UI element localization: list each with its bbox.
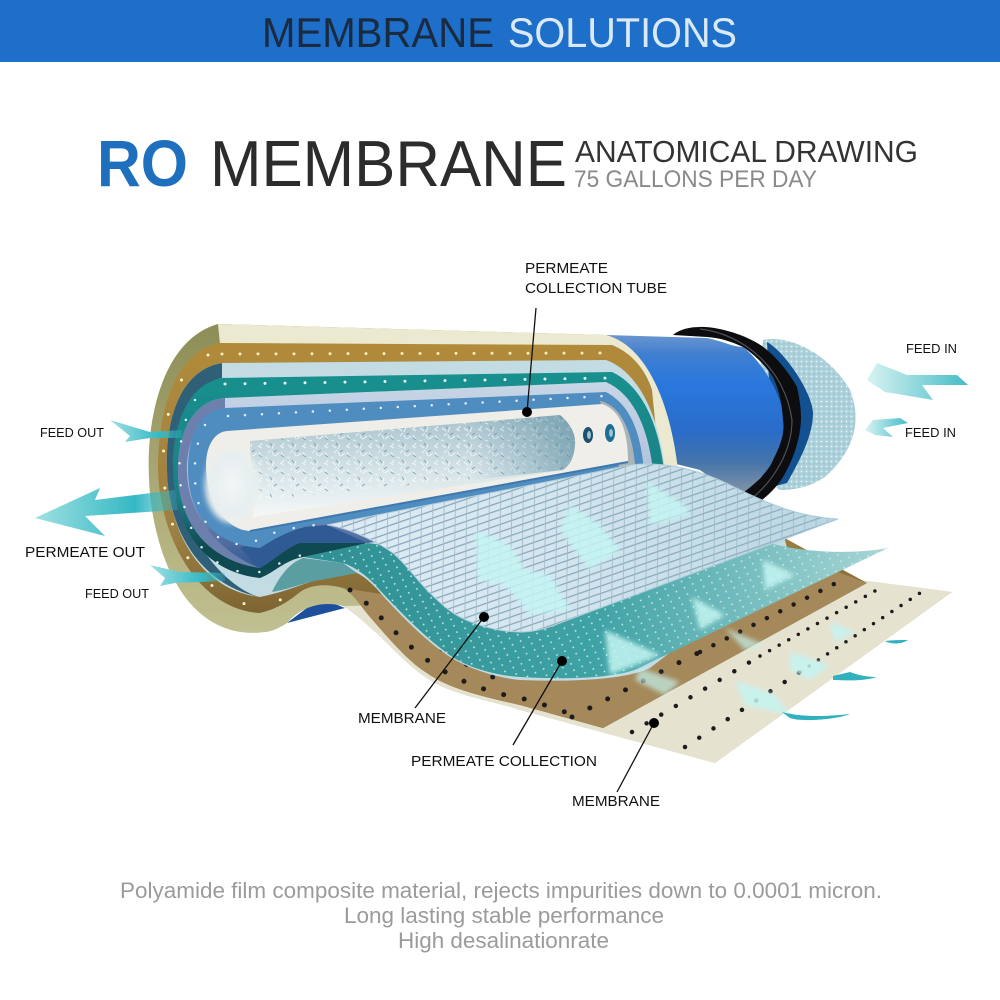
navy fold xyxy=(240,525,367,568)
cream sheet holes xyxy=(632,587,920,747)
labels: MEMBRANE xyxy=(358,710,446,727)
pale layer xyxy=(167,360,790,681)
blue inner layer xyxy=(188,392,644,548)
labels: FEED IN xyxy=(905,426,956,440)
labels xyxy=(25,260,957,810)
teal sheet perforations xyxy=(303,543,888,678)
leader lines xyxy=(415,308,659,792)
header band xyxy=(0,0,1000,62)
ring highlight xyxy=(700,329,792,500)
main title: 75 GALLONS PER DAY xyxy=(574,166,817,193)
brown flat sheet xyxy=(343,520,867,728)
labels: COLLECTION TUBE xyxy=(525,280,667,297)
mesh membrane sheet xyxy=(327,464,838,632)
steel arc xyxy=(167,363,260,597)
outer wrap layer xyxy=(149,324,952,763)
main title: RO xyxy=(97,126,188,200)
labels: PERMEATE OUT xyxy=(25,544,145,561)
footer text: High desalinationrate xyxy=(398,928,609,953)
labels: PERMEATE xyxy=(525,260,608,277)
header title: SOLUTIONS xyxy=(508,9,737,56)
tube end xyxy=(205,447,259,523)
tube highlight edge xyxy=(250,462,628,531)
main title: MEMBRANE xyxy=(210,127,567,200)
cream top band xyxy=(218,324,678,470)
arrow: feed out upper xyxy=(110,420,182,442)
membrane cartridge diagram xyxy=(149,324,952,763)
teal flat sheet xyxy=(303,543,888,678)
mesh end cap xyxy=(750,339,856,490)
arrow: feed out lower xyxy=(150,565,225,586)
main title xyxy=(97,126,918,200)
header title: MEMBRANE xyxy=(262,9,494,56)
labels: FEED OUT xyxy=(85,587,149,601)
teal exit swooshes xyxy=(782,640,908,720)
labels: MEMBRANE xyxy=(572,793,660,810)
tube holes xyxy=(583,424,615,443)
arrow: feed in lower xyxy=(865,418,908,437)
labels: FEED OUT xyxy=(40,426,104,440)
arrow: feed in upper xyxy=(867,363,968,400)
teal layer xyxy=(173,372,664,578)
brown layer xyxy=(158,343,867,728)
blue underside xyxy=(287,598,345,623)
arrow: permeate out xyxy=(35,488,178,536)
dotted perforation rows xyxy=(163,353,610,605)
footer text: Long lasting stable performance xyxy=(344,903,664,928)
white collection tube xyxy=(206,404,628,531)
footer text: Polyamide film composite material, rejects impurities down to 0.0001 micron. xyxy=(120,878,882,903)
dark teal band xyxy=(250,543,367,578)
labels: FEED IN xyxy=(906,342,957,356)
lavender arc xyxy=(178,398,260,568)
labels: PERMEATE COLLECTION xyxy=(411,753,597,770)
brown sheet holes xyxy=(350,582,838,717)
flow arrows on sheets xyxy=(475,482,855,715)
blue shell xyxy=(606,335,785,497)
inner pale layer xyxy=(178,382,653,568)
teal grey patch xyxy=(272,558,357,592)
blue dark collar xyxy=(760,342,813,490)
main title: ANATOMICAL DRAWING xyxy=(575,134,918,169)
tube window xyxy=(250,415,575,517)
inner grey liner right xyxy=(600,401,635,470)
black rubber ring xyxy=(673,327,801,507)
cream flat sheet xyxy=(343,577,952,763)
footer text xyxy=(120,878,882,953)
